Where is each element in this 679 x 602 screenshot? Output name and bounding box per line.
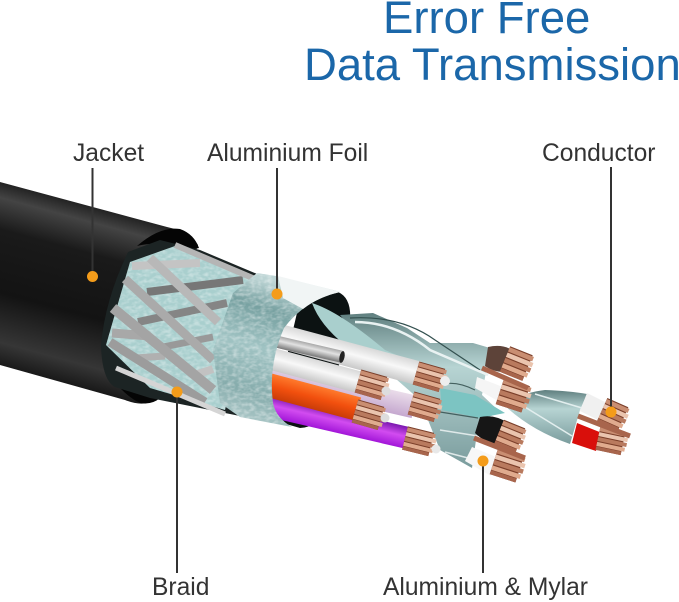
wire: white upper [253,318,421,385]
callout: conductor: Conductor [542,140,655,167]
aluminium foil shield [213,273,340,427]
callout: braid [152,386,209,601]
pair ends: black and white [465,416,528,484]
callout: aluminium and mylar: Aluminium & Mylar [383,574,588,601]
callout: braid: Braid [152,574,209,601]
title [304,0,679,90]
insulated wires [243,318,421,449]
copper conductors: wire bundle [352,361,450,457]
twisted foil pairs [312,303,587,468]
wire: orange [243,367,361,421]
wire bundle opening [272,290,350,428]
pair ends: white and red [572,393,631,456]
wire: white middle [243,341,363,393]
cross strands [112,263,243,375]
title: Data Transmission [304,39,679,90]
cable illustration [0,182,631,484]
cable jacket [0,182,199,404]
pair ends: brown and white [475,346,536,414]
callout: jacket [73,140,144,282]
callout: aluminium and mylar [383,456,588,601]
callout: aluminium foil: Aluminium Foil [207,140,368,167]
wire: grey tube [249,330,346,363]
wire: purple [248,391,411,449]
diagonal strands [110,245,255,414]
callout: jacket: Jacket [73,140,144,167]
callout: aluminium foil [207,140,368,300]
wire: lilac [262,361,417,418]
braid shield [101,240,262,416]
callout: conductor [542,140,655,418]
